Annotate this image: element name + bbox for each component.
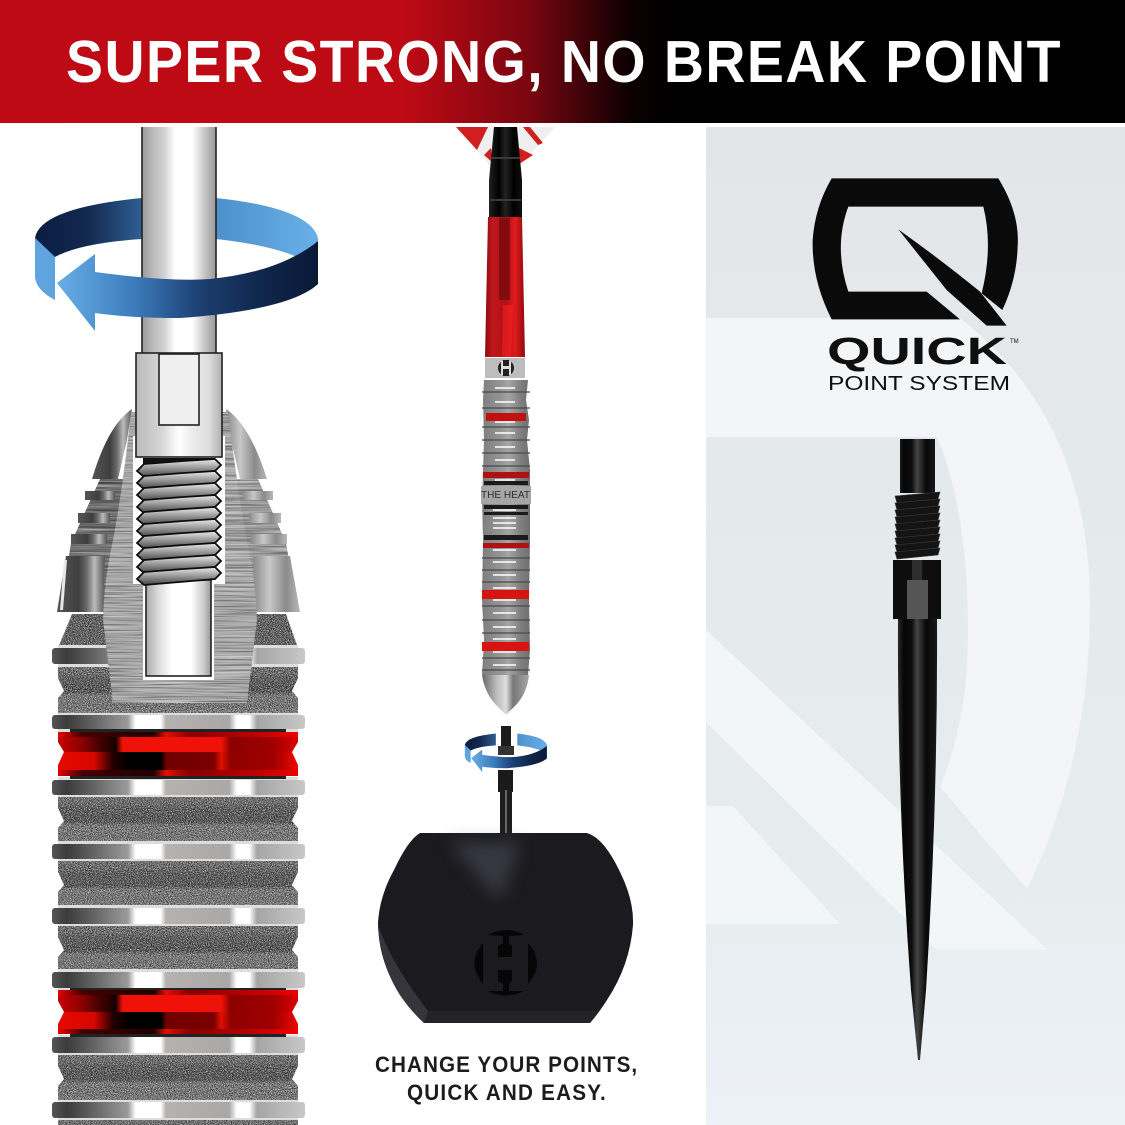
shaft outline xyxy=(142,127,216,353)
point collar xyxy=(893,560,941,619)
logo wordmark: POINT SYSTEM xyxy=(828,373,1010,395)
engraved label: THE HEAT xyxy=(481,490,530,501)
base lower strip xyxy=(414,1011,598,1023)
logo wordmark: TM xyxy=(1010,339,1019,345)
point holder base xyxy=(378,833,633,1023)
dart red shaft section xyxy=(485,217,525,357)
dart stem xyxy=(489,127,522,217)
caption xyxy=(375,1051,637,1105)
lower bore xyxy=(146,580,211,676)
header banner xyxy=(0,0,1125,123)
caption: QUICK AND EASY. xyxy=(407,1079,606,1105)
barrel ridge lines xyxy=(482,392,530,670)
base highlight xyxy=(450,842,520,895)
engraved label band xyxy=(481,486,531,504)
rotation arrow: rear of ring xyxy=(35,198,318,300)
black steel point xyxy=(893,439,941,1060)
small rotation ring, rear xyxy=(465,733,547,763)
panel: quick point system background xyxy=(706,127,1125,1125)
dark rings xyxy=(484,481,528,485)
threads xyxy=(137,458,221,585)
caption: CHANGE YOUR POINTS, xyxy=(375,1051,637,1077)
H logo xyxy=(474,930,537,996)
point taper xyxy=(898,619,937,1060)
black point pin xyxy=(498,726,514,834)
red anodised band lower xyxy=(58,988,298,1037)
logo wordmark xyxy=(827,331,1019,395)
left nose fins xyxy=(57,409,132,612)
brushed silver cut section xyxy=(103,412,257,703)
title: SUPER STRONG, NO BREAK POINT xyxy=(66,29,1061,95)
red anodised band upper xyxy=(58,729,298,779)
dart barrel xyxy=(481,380,531,675)
right nose fins xyxy=(226,409,300,612)
rotation arrow: front of ring xyxy=(57,241,318,331)
big dart: barrel cutaway xyxy=(52,409,305,1125)
dart nose xyxy=(482,675,529,715)
dart flight xyxy=(456,127,555,166)
textured barrel segments xyxy=(58,614,298,1125)
silver rings xyxy=(52,645,305,1120)
logo wordmark: QUICK xyxy=(827,331,1008,373)
collar xyxy=(136,353,222,457)
white outline around insert xyxy=(133,436,225,680)
collar window xyxy=(159,354,199,425)
Q logo xyxy=(813,178,1018,326)
base left rim highlight xyxy=(378,925,428,1023)
barrel highlights xyxy=(493,388,516,665)
small rotation ring, front xyxy=(471,746,547,772)
shaft xyxy=(142,127,216,353)
point thread xyxy=(895,492,940,559)
red rings xyxy=(486,413,526,421)
dart silver logo ring xyxy=(485,358,525,378)
threaded point insert xyxy=(133,353,225,680)
